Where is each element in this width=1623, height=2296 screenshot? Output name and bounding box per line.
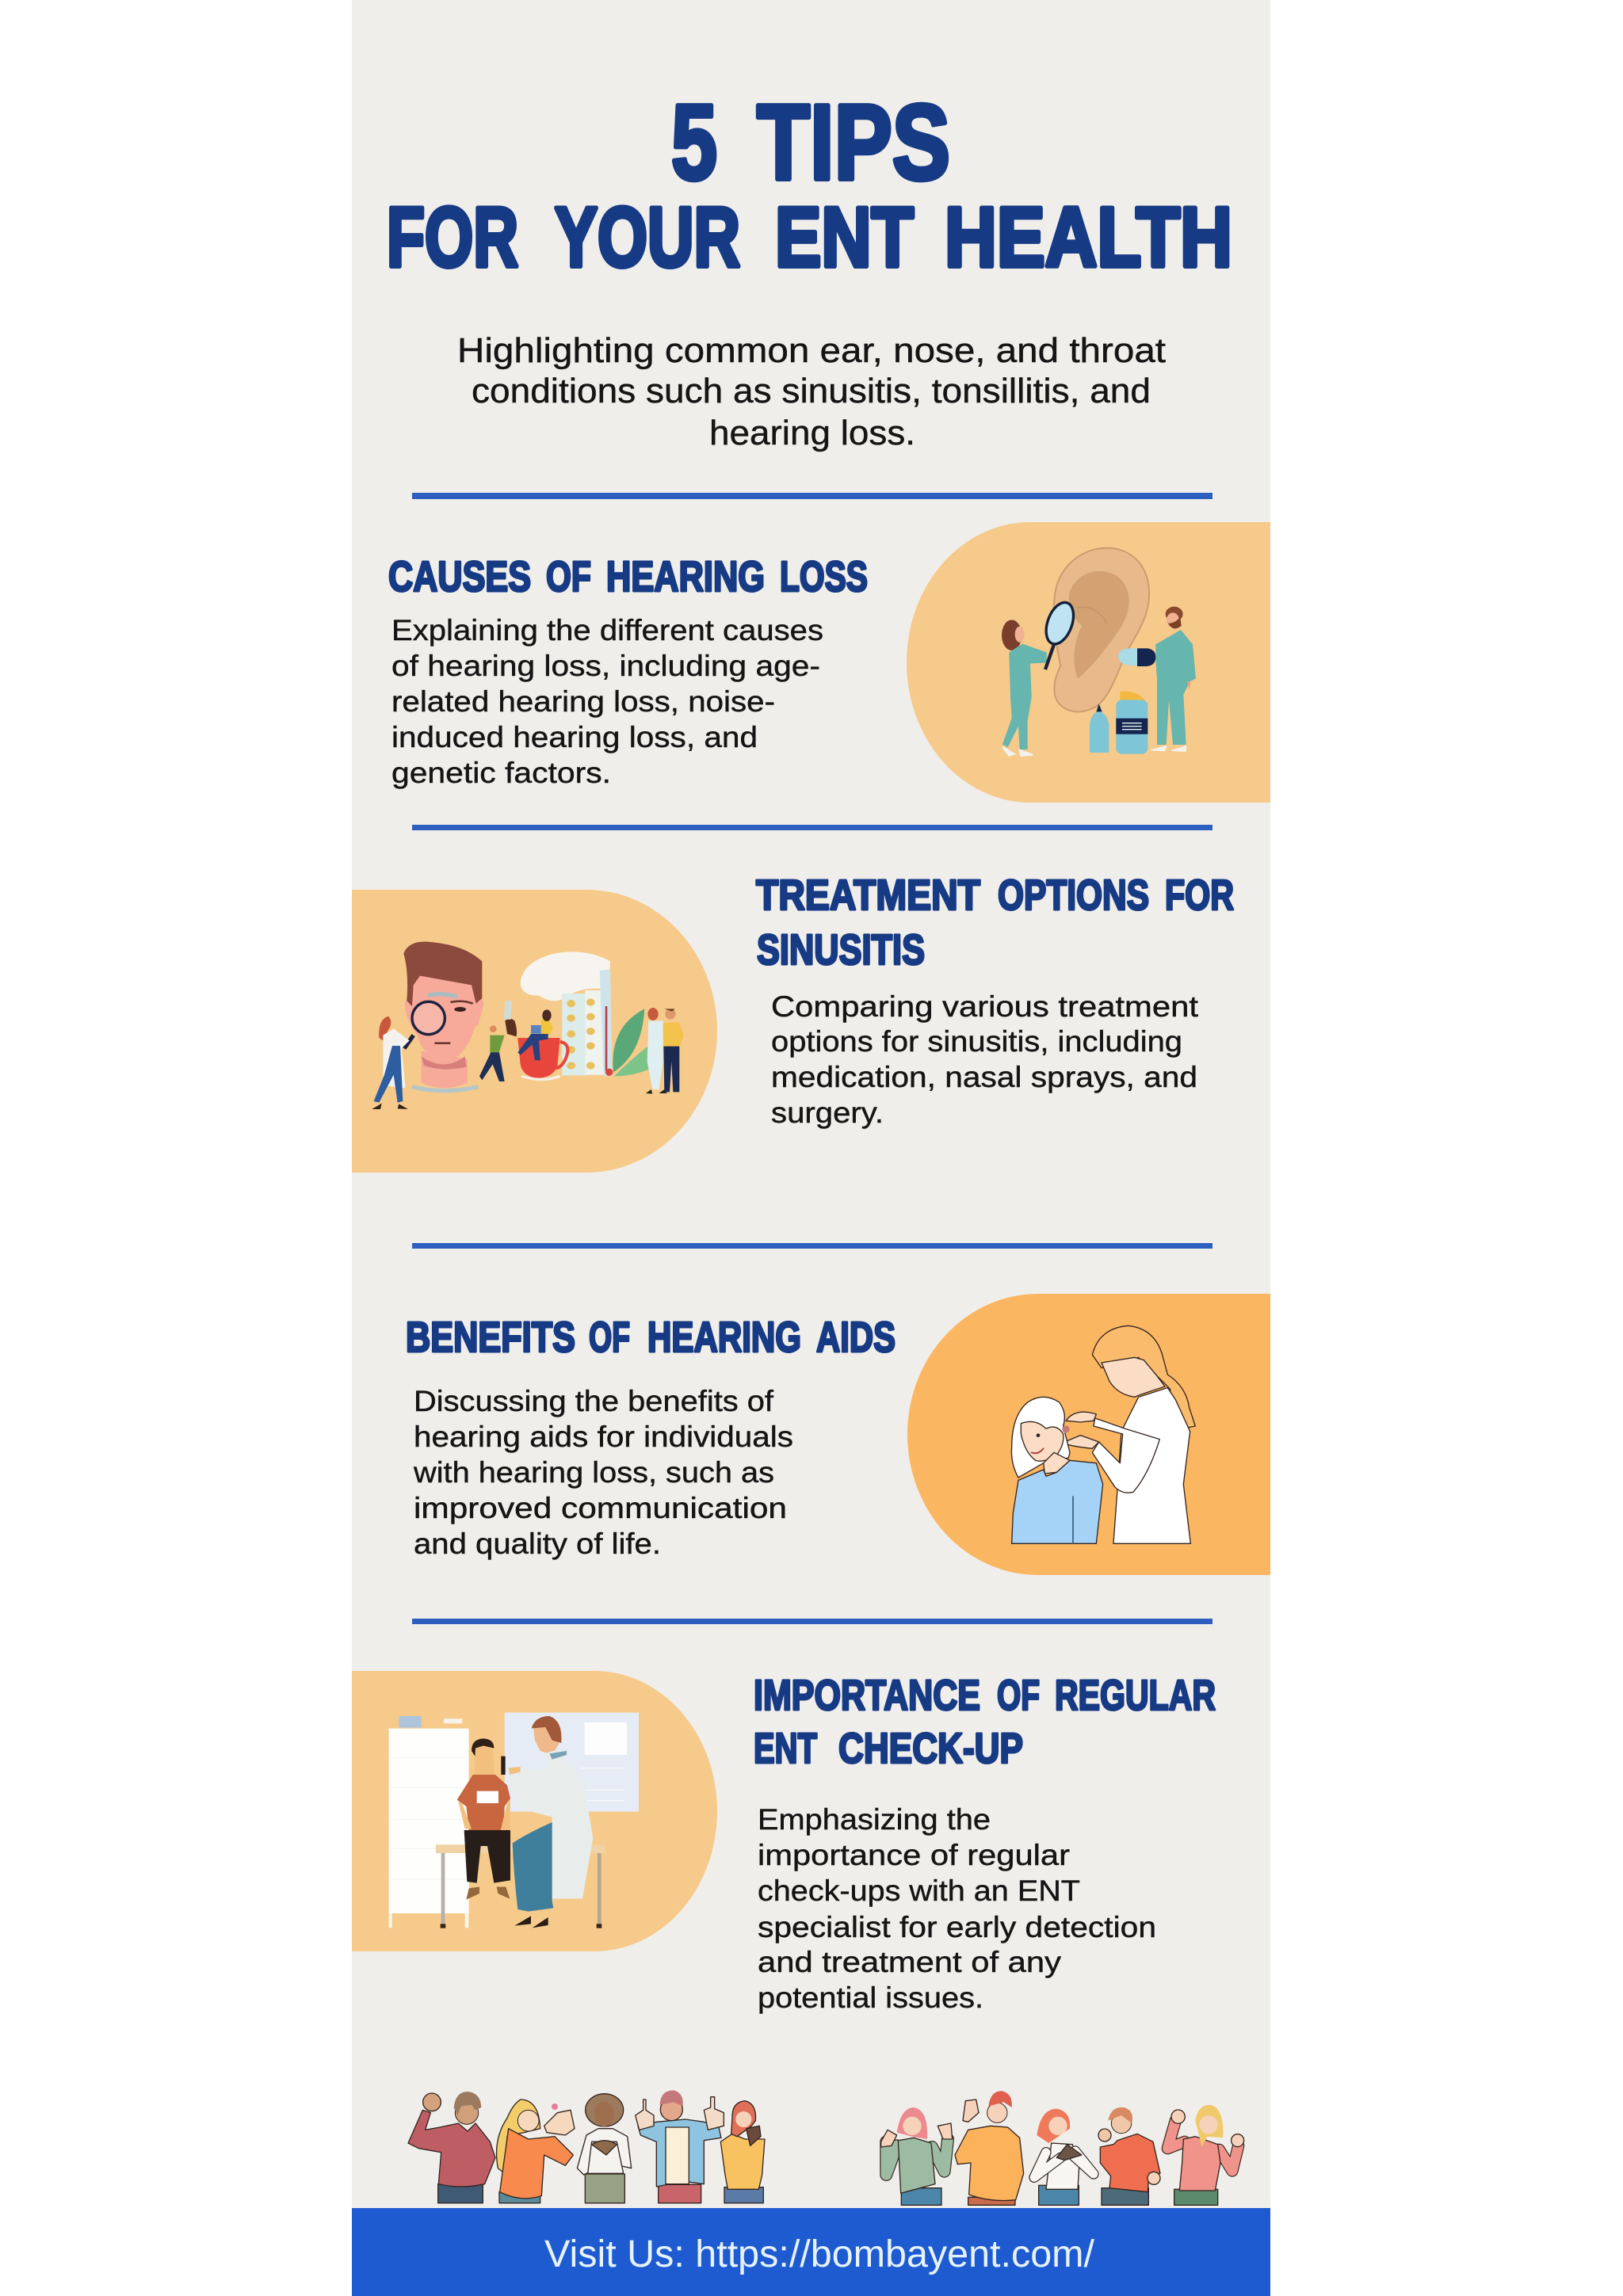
heading: causes of hearing loss [388,553,868,601]
heading: importance of regular ENT check-up [754,1672,1216,1772]
heading: importance of regular ENT check-up: CHECK-UP [838,1725,1023,1772]
heading: treatment options for sinusitis: SINUSITIS [757,926,925,974]
heading: benefits of hearing aids: HEARING [647,1314,801,1361]
panel: causes of hearing loss [388,522,1270,803]
title: ENT [775,189,914,284]
title: YOUR [555,189,740,284]
icon: medicine bottles [1090,692,1148,754]
heading: treatment options for sinusitis [756,871,1234,974]
body text: benefits: and quality of life. [414,1527,661,1560]
title: FOR [387,189,518,284]
body text: importance: check-ups with an ENT [758,1875,1080,1907]
people group: right [881,2091,1244,2205]
illustration: ear examination [907,522,1270,803]
icon: man's head [403,942,484,1091]
person 4 [636,2090,724,2203]
panel: treatment options for sinusitis [352,871,1234,1173]
person 2 [497,2100,575,2203]
body text: benefits: improved communication [414,1492,787,1524]
person 8 [1034,2109,1094,2205]
icon: walking person [479,1001,517,1081]
illustration: sinus treatment [352,890,717,1173]
body text: benefits: Discussing the benefits of [414,1385,774,1417]
icon: couple [646,1008,684,1094]
heading: treatment options for sinusitis: OPTIONS [998,871,1149,919]
body text: importance: and treatment of any [758,1946,1062,1978]
heading: benefits of hearing aids: AIDS [816,1314,896,1361]
title: 5 [671,82,717,202]
people group: left [408,2090,765,2203]
body text: benefits [413,1385,793,1560]
icon: boy patient [457,1738,510,1900]
body text: causes: induced hearing loss, and [391,721,758,753]
body text: benefits: with hearing loss, such as [413,1456,774,1489]
heading: causes of hearing loss: HEARING [606,553,765,601]
icon: thermometer [600,969,613,1076]
person 3 [577,2094,632,2203]
icon: doctor with magnifier [372,1016,410,1109]
person 5 [720,2101,765,2203]
person 1 [408,2092,495,2203]
footer bar [352,2208,1270,2296]
body text: benefits: hearing aids for individuals [414,1421,793,1453]
heading: benefits of hearing aids: BENEFITS [406,1314,575,1361]
icon: nurse [1064,1325,1195,1543]
heading: importance of regular ENT check-up: ENT [754,1725,817,1772]
heading: benefits of hearing aids [406,1314,896,1361]
body text: causes: of hearing loss, including age- [391,650,820,682]
heading: importance of regular ENT check-up: REGULAR [1055,1672,1216,1719]
body text: importance: potential issues. [758,1981,983,2014]
intro text [457,331,1166,452]
icon: bench [436,1844,605,1928]
icon: elderly patient [1011,1397,1103,1543]
title: TIPS [757,82,950,202]
person 7 [955,2091,1024,2205]
person 9 [1098,2107,1160,2205]
icon: woman doctor with magnifier [1002,599,1079,756]
heading: importance of regular ENT check-up: IMPORTANCE [754,1672,980,1719]
heading: treatment options for sinusitis: TREATMENT [756,871,980,919]
icon: leaves [613,1009,648,1076]
panel: benefits of hearing aids [406,1294,1270,1575]
icon: doctor [503,1716,593,1928]
icon: capsule [1118,648,1155,666]
icon: steam cloud [521,952,610,1001]
body text: causes [391,614,823,789]
body text: treatment: surgery. [771,1097,884,1129]
icon: wall chart [505,1713,639,1812]
person 6 [881,2107,953,2205]
body text: importance: specialist for early detection [758,1911,1156,1943]
icon: red cup with seated person [517,1009,567,1079]
heading: causes of hearing loss: CAUSES [388,553,531,601]
body text: treatment: medication, nasal sprays, and [771,1061,1197,1093]
body text: importance [758,1803,1156,2014]
title [387,82,1232,284]
heading: causes of hearing loss: OF [546,553,591,601]
panel: importance of regular ENT check-up [352,1671,1216,2014]
intro text: Highlighting common ear, nose, and throat [457,331,1166,370]
body text: treatment: Comparing various treatment [771,990,1199,1023]
heading: treatment options for sinusitis: FOR [1165,871,1234,919]
body text: importance: importance of regular [758,1839,1070,1871]
heading: causes of hearing loss: LOSS [780,553,868,601]
body text: causes: related hearing loss, noise- [391,685,775,718]
intro text: hearing loss. [709,414,915,452]
illustration: fitting a hearing aid [907,1294,1270,1575]
body text: causes: genetic factors. [391,757,611,789]
icon: pill blisters [562,990,605,1075]
footer link text: Visit Us: https://bombayent.com/ [544,2233,1095,2275]
icon: man doctor [1151,607,1196,751]
body text: treatment [771,990,1199,1129]
heading: importance of regular ENT check-up: OF [997,1672,1040,1719]
body text: treatment: options for sinusitis, including [771,1025,1182,1058]
person 10 [1167,2105,1244,2205]
intro text: conditions such as sinusitis, tonsillitis, and [472,372,1151,410]
icon: cabinet [389,1716,469,1928]
icon: ear [1054,548,1149,711]
body text: importance: Emphasizing the [758,1803,991,1836]
title: HEALTH [945,189,1232,284]
illustration: ENT examination [352,1671,717,1951]
heading: benefits of hearing aids: OF [589,1314,630,1361]
body text: causes: Explaining the different causes [391,614,823,646]
